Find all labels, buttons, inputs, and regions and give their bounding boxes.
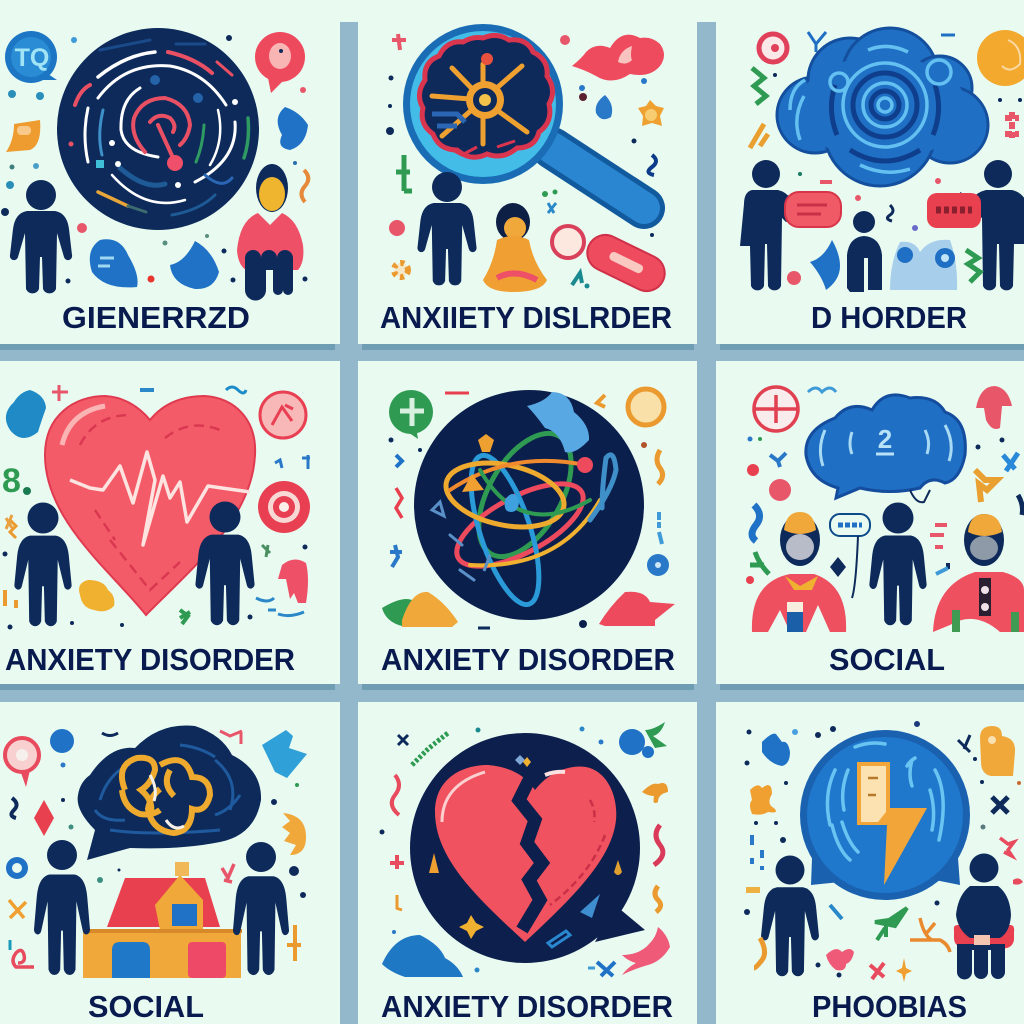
person left bbox=[34, 840, 90, 975]
splash bbox=[527, 392, 589, 452]
maze circle bbox=[57, 28, 259, 230]
blue cloud bubble: 2 bbox=[878, 424, 892, 454]
label: ANXIETY DISORDER bbox=[5, 642, 295, 677]
icon: blue blob bbox=[382, 935, 463, 977]
label: PHOOBIAS bbox=[812, 989, 967, 1024]
meditating figure bbox=[483, 203, 547, 292]
icon: TQ bubble: TQ bbox=[15, 44, 49, 72]
panel: anxiety disorder magnifier bbox=[358, 0, 697, 350]
confetti bbox=[388, 393, 669, 628]
decorations bbox=[2, 385, 310, 630]
person left bbox=[14, 502, 72, 626]
confetti bbox=[386, 34, 664, 288]
person left bbox=[761, 856, 819, 976]
speech pills bbox=[785, 192, 981, 228]
person middle bbox=[847, 211, 882, 292]
blue spiral cloud bbox=[777, 28, 988, 186]
label: D HORDER bbox=[811, 300, 967, 335]
person left bbox=[740, 160, 804, 290]
label: ANXIIETY DISLRDER bbox=[380, 300, 672, 335]
icon: green bubble bbox=[389, 390, 433, 439]
label: SOCIAL bbox=[88, 989, 204, 1024]
confetti bbox=[746, 388, 1022, 584]
person right bbox=[233, 842, 289, 975]
navy circle bbox=[410, 733, 645, 963]
panel: phobias bbox=[716, 702, 1024, 1024]
tangled circle bbox=[414, 390, 644, 620]
panel: tangled circle bbox=[358, 361, 697, 690]
confetti bbox=[1, 35, 308, 284]
person seated bbox=[954, 854, 1014, 980]
decorations: 8 bbox=[2, 462, 21, 500]
icon: orange chat bbox=[6, 120, 40, 152]
decorations bbox=[380, 726, 670, 976]
panel: generalized bbox=[0, 0, 340, 350]
person center bbox=[869, 502, 927, 625]
panel: heart bbox=[0, 361, 340, 690]
blue bubble bbox=[800, 730, 970, 900]
house bbox=[83, 862, 242, 978]
man right bbox=[933, 514, 1024, 632]
icon: blue flower bbox=[619, 722, 667, 758]
blue cloud bubble bbox=[806, 395, 965, 502]
target icon bbox=[759, 34, 787, 62]
person left bbox=[10, 180, 72, 293]
person bbox=[417, 172, 477, 285]
icon: TQ bubble bbox=[5, 31, 57, 83]
label: ANXIETY DISORDER bbox=[381, 642, 675, 677]
icon: red face bbox=[976, 386, 1012, 429]
decorations bbox=[5, 729, 307, 967]
icon: red shape bbox=[599, 592, 675, 626]
small speech bbox=[830, 514, 870, 598]
magnifier bbox=[403, 24, 644, 208]
broken heart bbox=[435, 765, 616, 942]
red cloud bbox=[572, 35, 664, 81]
heart bbox=[45, 396, 255, 615]
person right bbox=[960, 160, 1024, 290]
label: ANXIETY DISORDER bbox=[381, 989, 673, 1024]
decorations bbox=[744, 721, 1023, 982]
no sign bbox=[754, 387, 798, 431]
panel: broken heart bbox=[358, 702, 697, 1024]
targets bbox=[258, 392, 310, 533]
man left bbox=[752, 512, 846, 632]
navy cloud bbox=[78, 725, 261, 860]
person right bbox=[195, 502, 255, 625]
orange circle bbox=[977, 30, 1024, 86]
panel: social house bbox=[0, 702, 340, 1024]
icon: blue blobs bbox=[90, 107, 308, 289]
label: SOCIAL bbox=[829, 642, 945, 677]
decorations bbox=[750, 32, 1022, 290]
icon: red bubble bbox=[255, 32, 305, 93]
pills bbox=[552, 226, 671, 297]
panel: disorder cloud bbox=[716, 0, 1024, 350]
icon: gold ring bbox=[628, 389, 664, 425]
label: GIENERRZD bbox=[62, 300, 250, 335]
lightning bolt bbox=[857, 762, 927, 885]
icon: vegetables bbox=[382, 592, 458, 627]
person seated bbox=[237, 164, 303, 300]
panel: social cloud bbox=[716, 361, 1024, 690]
sparkles bbox=[429, 755, 622, 947]
